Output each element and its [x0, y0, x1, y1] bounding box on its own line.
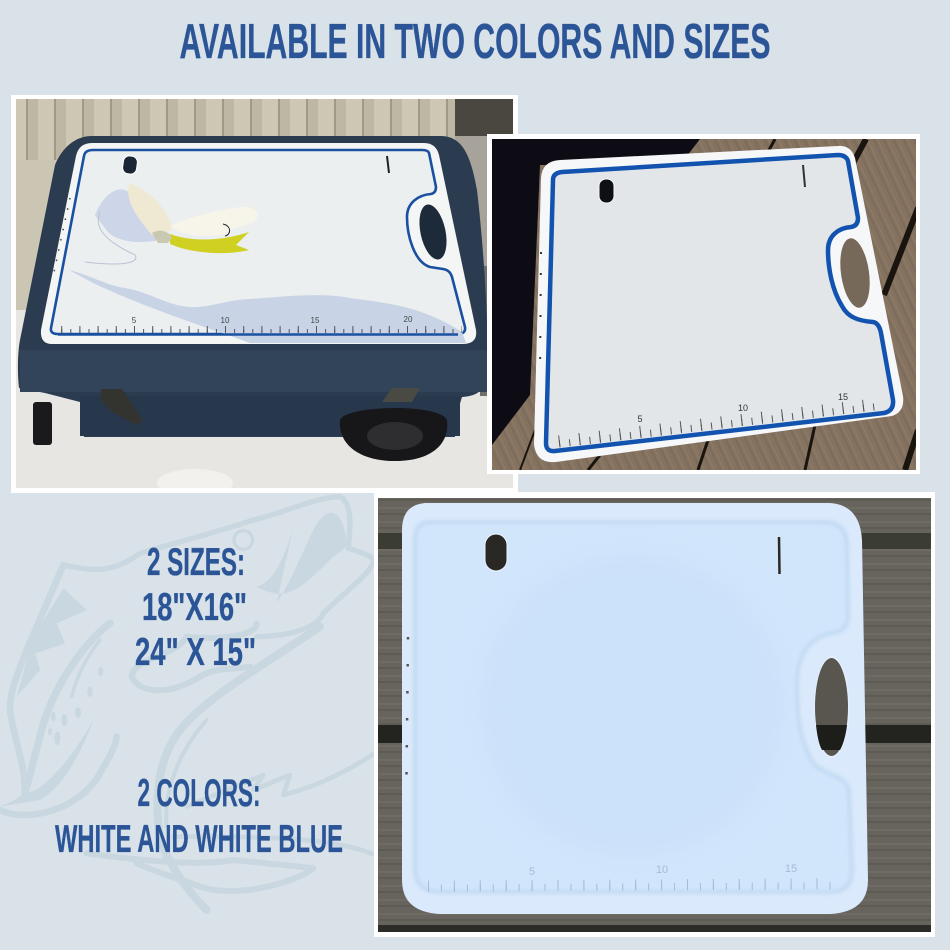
side holes: [54, 198, 70, 272]
ruler numbers: 5: [132, 316, 137, 325]
cooler body: [18, 136, 488, 437]
ruler numbers: [638, 394, 848, 422]
cutting board: [534, 146, 903, 462]
ruler numbers: 5: [529, 866, 535, 878]
text: sizes: [135, 541, 256, 674]
text: colors: WHITE AND WHITE BLUE: [55, 818, 343, 861]
hang slot: [122, 155, 138, 175]
photo: blue trim board on deck: [487, 134, 920, 474]
ruler numbers: 15: [311, 316, 320, 325]
handle hole: [814, 656, 850, 758]
text: sizes: 2 SIZES:: [147, 541, 245, 584]
ruler ticks: [61, 330, 462, 331]
cutting board: [402, 503, 868, 914]
knife slit: [803, 165, 805, 187]
ruler ticks: [559, 403, 883, 444]
text: colors: 2 COLORS:: [138, 772, 260, 815]
cooler wheel: [340, 408, 447, 461]
text: sizes: 24" X 15": [135, 631, 256, 674]
ruler numbers: 20: [404, 315, 413, 324]
handle hole: [419, 204, 447, 260]
knife slit: [387, 156, 389, 173]
hang slot: [485, 534, 507, 571]
side holes: [406, 637, 408, 776]
ruler numbers: 10: [221, 316, 230, 325]
floor drain: [157, 469, 233, 488]
lure: [85, 183, 258, 264]
shadow on board: [69, 270, 466, 343]
text: colors: [55, 772, 343, 861]
deck gaps: [520, 139, 918, 470]
cooler leg: [33, 402, 52, 445]
side holes: [540, 252, 541, 375]
ruler ticks: [428, 884, 842, 888]
ruler numbers: 10: [656, 864, 668, 876]
text: sizes: 18"X16": [142, 586, 247, 629]
knife slit: [778, 537, 781, 574]
ruler numbers: 5: [637, 414, 643, 424]
ruler numbers: [132, 316, 412, 323]
cutting board: [41, 143, 476, 344]
watermark: fish: [0, 497, 380, 910]
cooler latch: [101, 389, 143, 425]
ruler numbers: 15: [785, 863, 797, 875]
ruler numbers: 15: [838, 392, 848, 402]
photo: white and blue board on cooler: [11, 95, 518, 497]
hang slot: [599, 179, 614, 203]
handle hole: [840, 238, 870, 308]
photo: white board on wood: [374, 492, 935, 937]
ruler numbers: 10: [738, 403, 748, 413]
ruler numbers: [530, 864, 797, 875]
